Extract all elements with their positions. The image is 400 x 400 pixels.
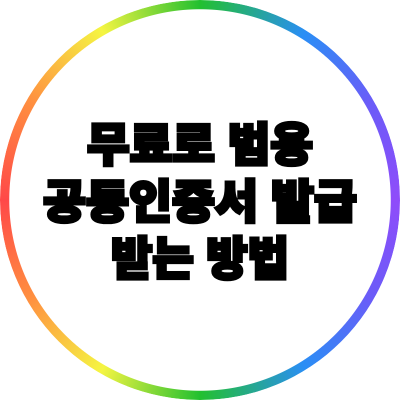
title line 1: 무료로 범용 — [87, 119, 313, 171]
title line 2: 공동인증서 발급 — [43, 176, 357, 228]
title line 3: 받는 방법 — [111, 233, 289, 285]
